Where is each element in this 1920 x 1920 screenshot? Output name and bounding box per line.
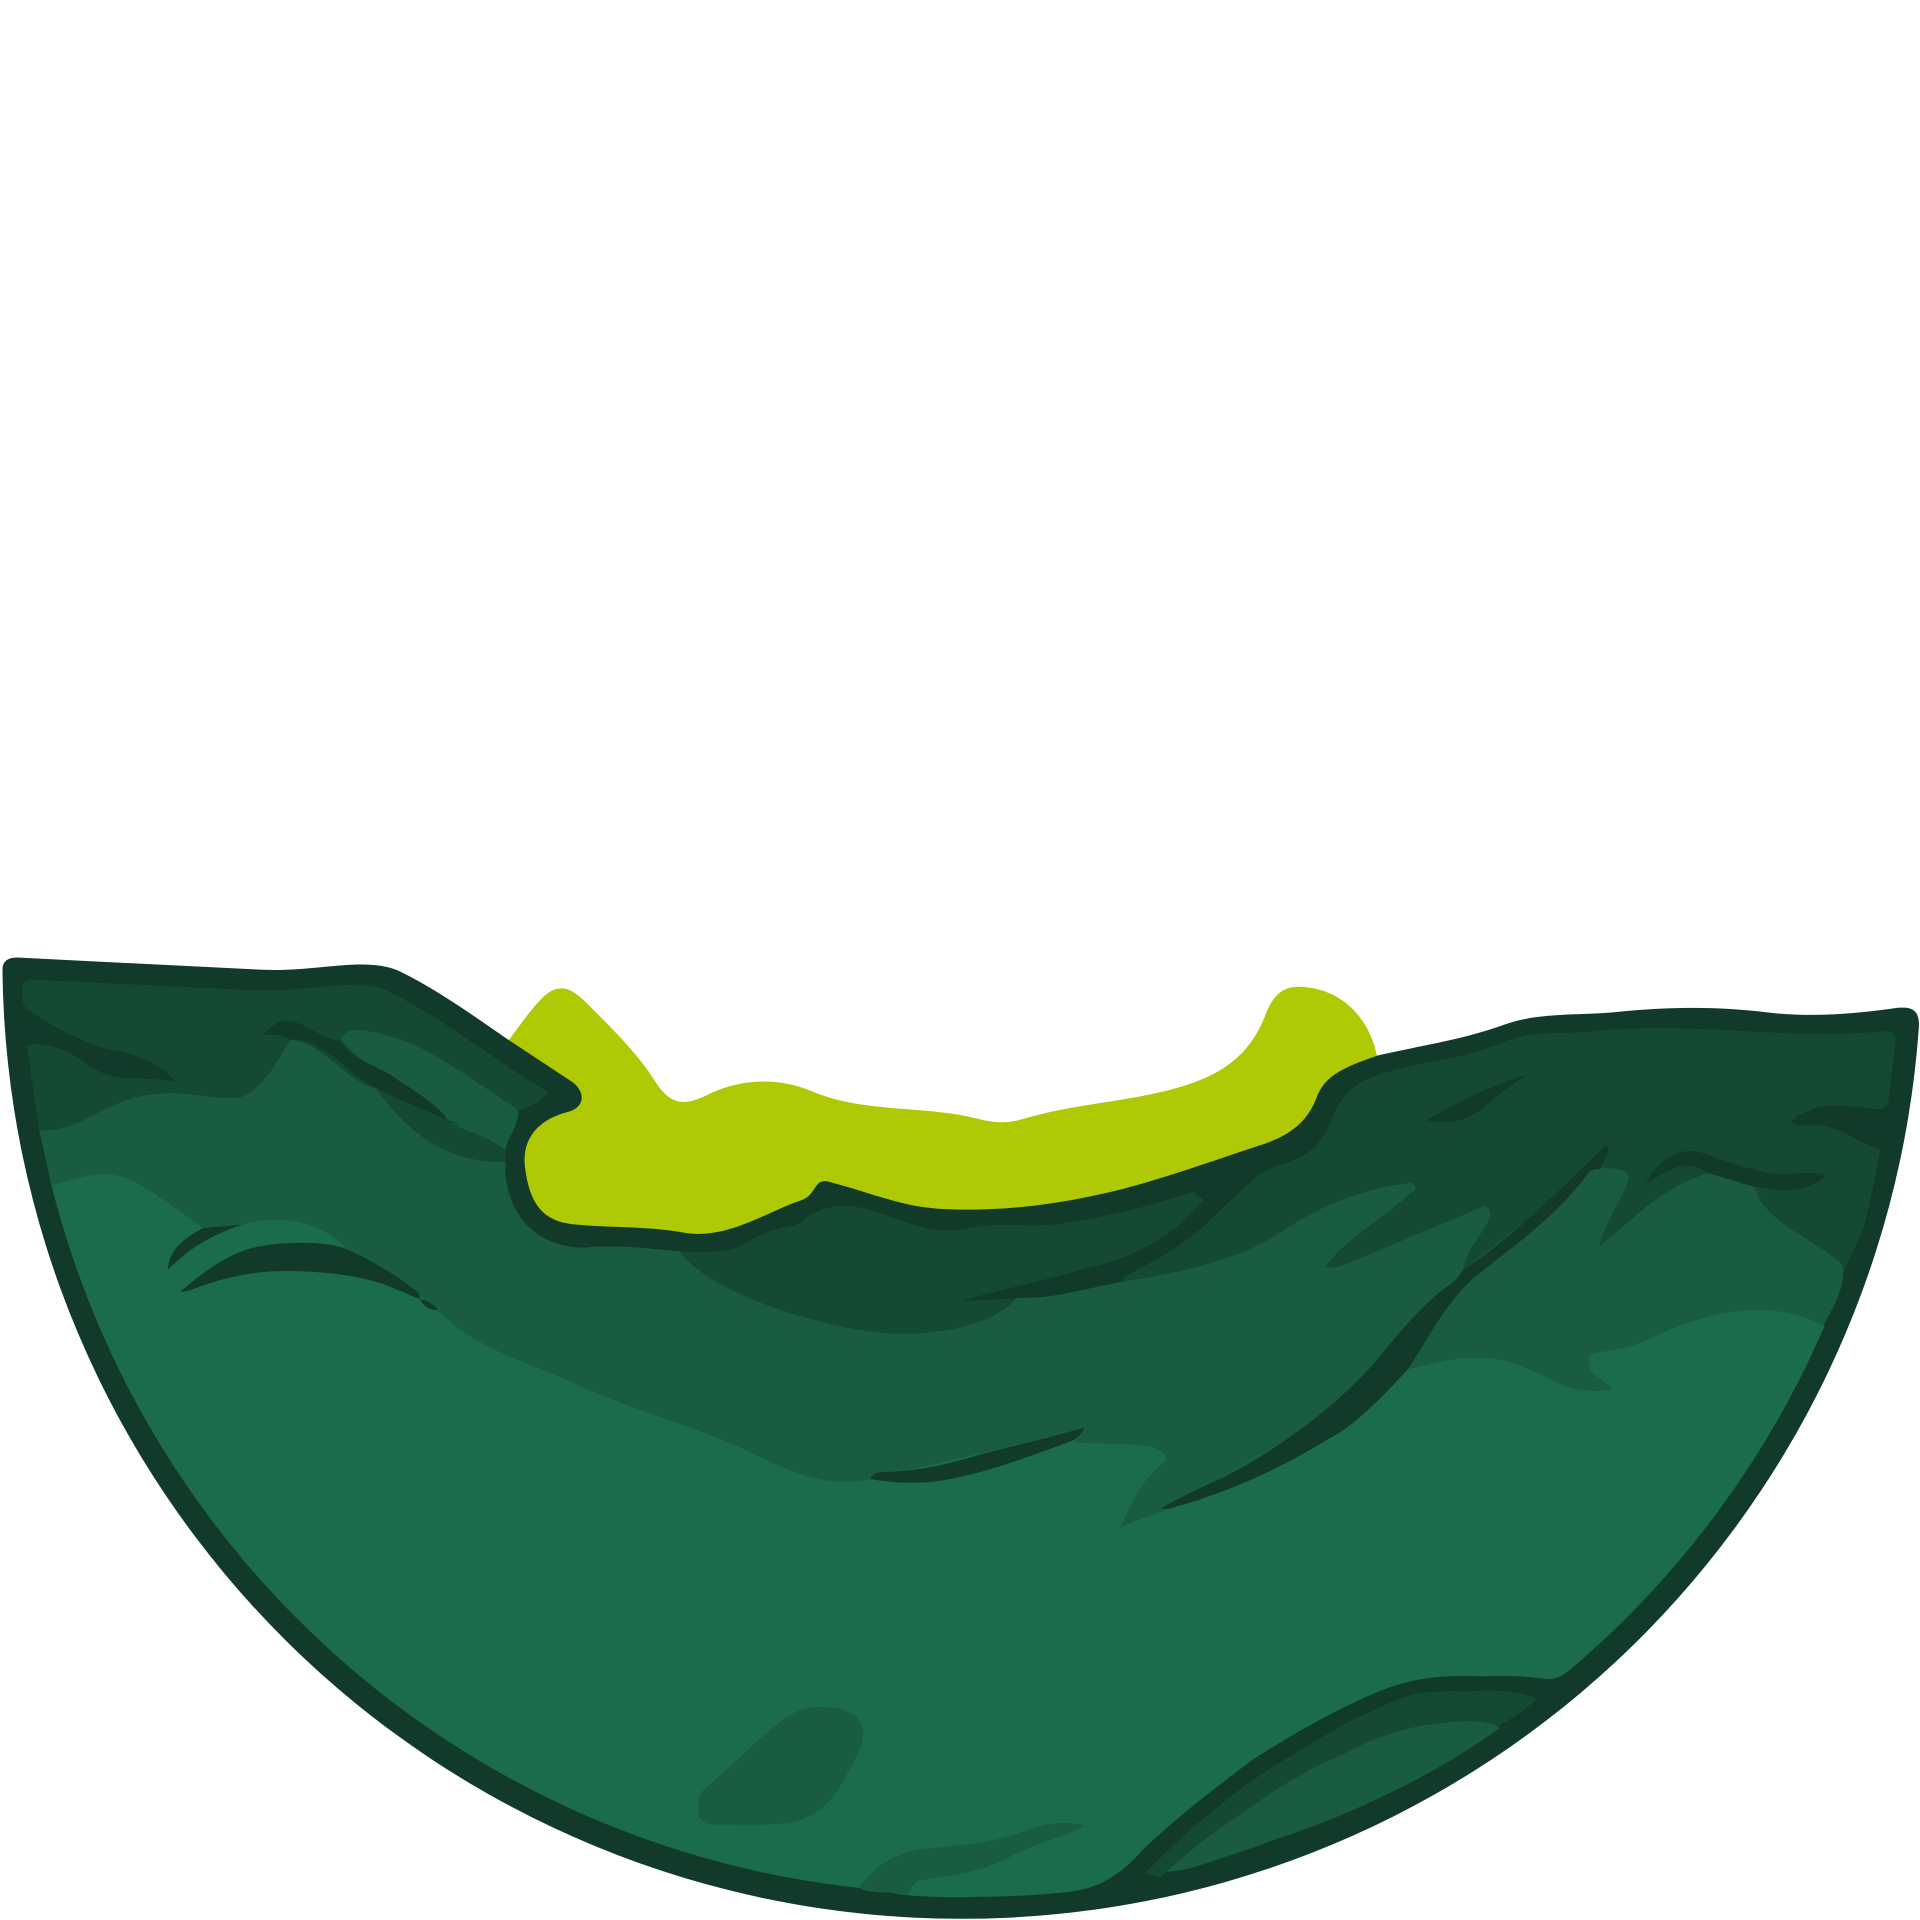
- leaf fold dark: [1145, 1691, 1537, 1877]
- bowl rim: dark outer shape: [2, 958, 1919, 1919]
- mid green layer: [39, 1040, 1843, 1592]
- central diagonal vein: [1161, 1145, 1609, 1509]
- right hook shadow: [1790, 1096, 1910, 1157]
- bowl blotch: [698, 1707, 863, 1825]
- lower right folded leaf: [1145, 1691, 1537, 1877]
- bowl inner: darkest green layer: [22, 980, 1896, 1408]
- top-left patch: lighter leaf fold: [340, 1030, 518, 1150]
- top-left vein: [263, 1021, 460, 1125]
- yellow-green filling: [508, 987, 1378, 1286]
- bottom streak: [860, 1823, 1084, 1894]
- small left leaf shadow: [168, 1224, 242, 1270]
- right curved shadow: [1646, 1151, 1827, 1190]
- centre leaf shadow: [871, 1428, 1084, 1483]
- upper right small blade shadow: [1427, 1075, 1527, 1122]
- leaf fold mid: [1166, 1721, 1500, 1872]
- long left leaf shadow: [180, 1243, 438, 1310]
- left blade shadow: [17, 994, 175, 1081]
- bright green main body: [51, 1174, 1824, 1897]
- rim strip under the filling: [961, 1157, 1277, 1300]
